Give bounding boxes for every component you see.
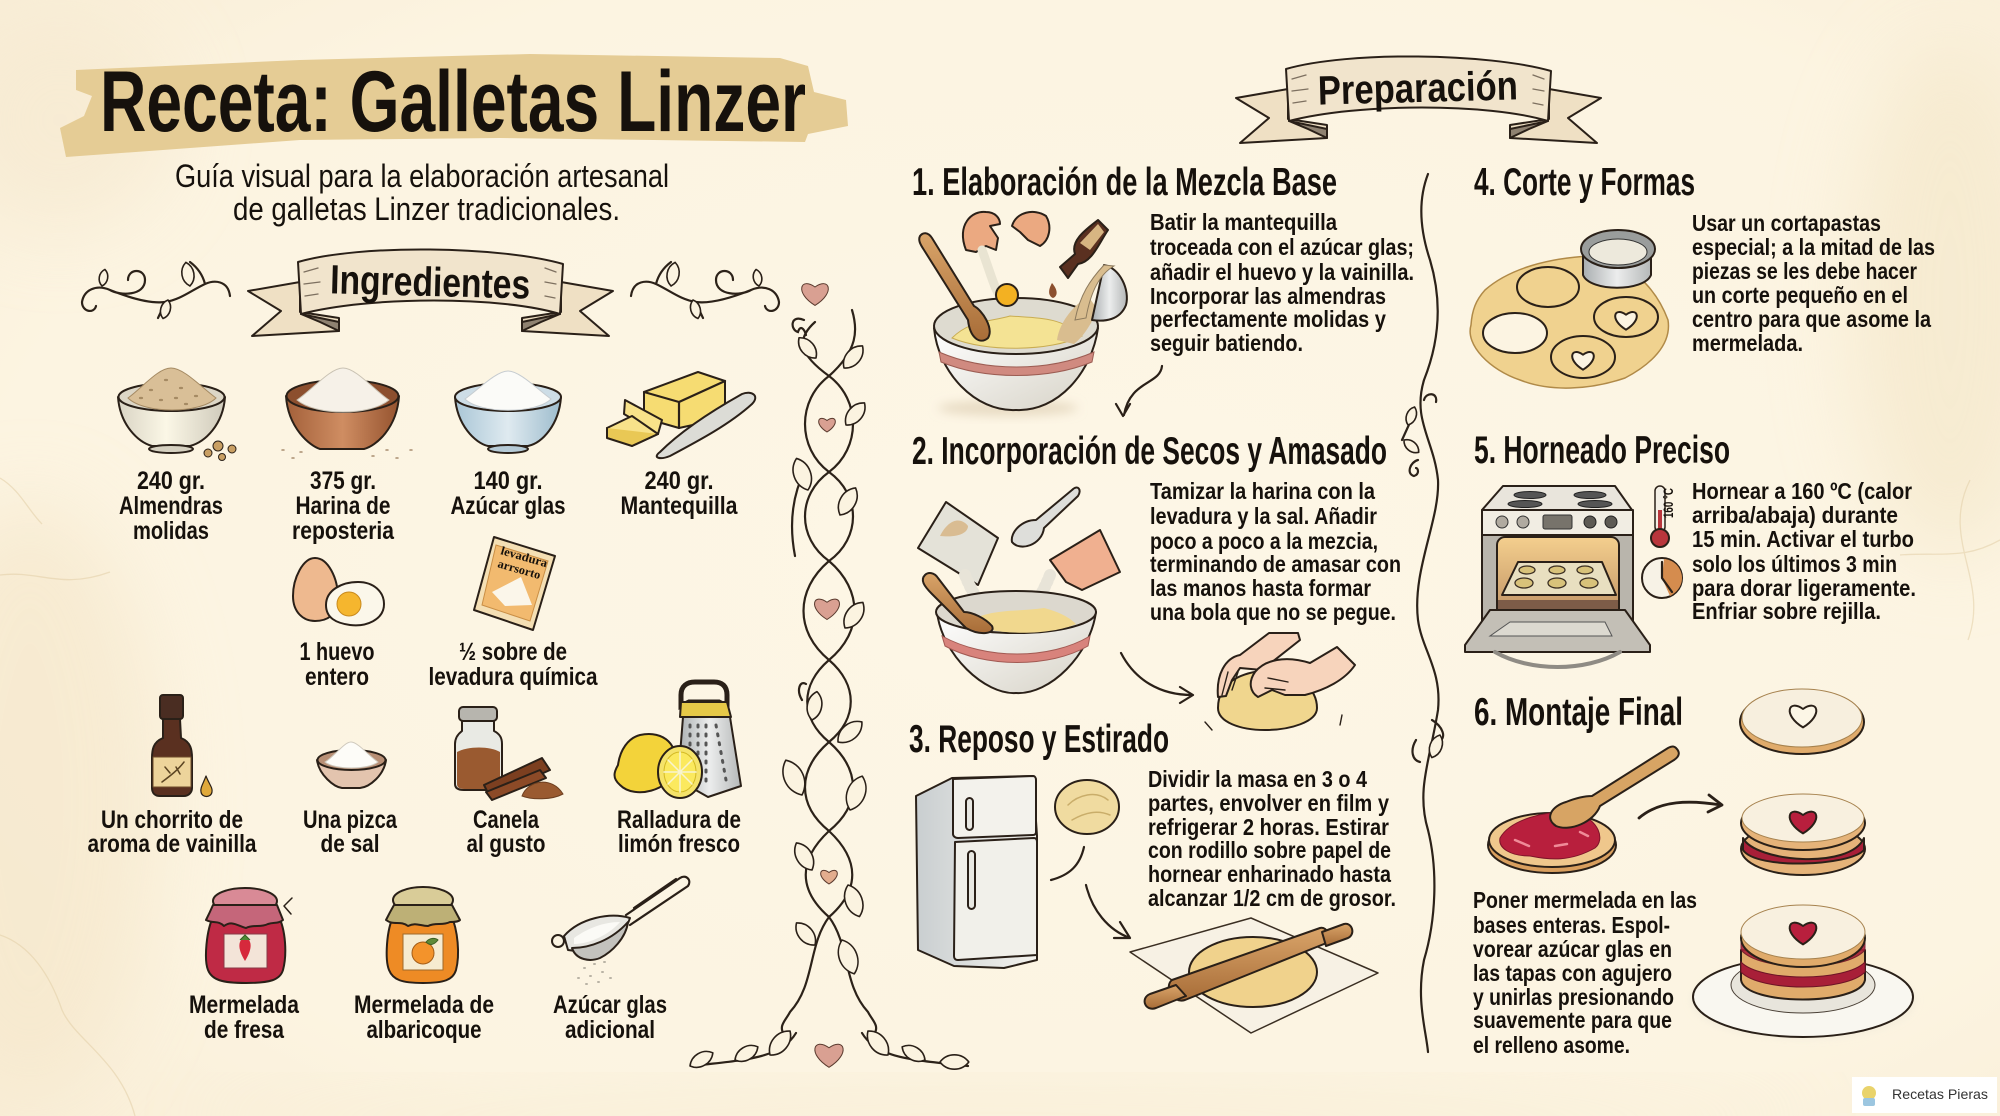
body text: una bola que no se pegue. xyxy=(1150,599,1396,625)
label: levadura química xyxy=(428,663,598,691)
body text: Dividir la masa en 3 o 4 xyxy=(1148,766,1367,792)
arrow xyxy=(1121,653,1193,703)
step 2 xyxy=(912,430,1401,730)
label: al gusto xyxy=(466,830,546,858)
body text: piezas se les debe hacer xyxy=(1692,258,1917,284)
label: limón fresco xyxy=(618,830,740,858)
body text: mermelada. xyxy=(1692,330,1803,356)
step 4 xyxy=(1470,161,1935,388)
banner: Preparación xyxy=(1236,56,1601,143)
body text: partes, envolver en film y xyxy=(1148,790,1389,816)
label xyxy=(354,991,494,1044)
label: Un chorrito de xyxy=(101,806,243,834)
label: Harina de xyxy=(296,492,391,520)
body text: un corte pequeño en el xyxy=(1692,282,1908,308)
heading: 6. Montaje Final xyxy=(1474,691,1683,734)
banner: Preparación: Preparación xyxy=(1317,62,1518,114)
ingredient: huevo xyxy=(293,558,384,691)
label: Azúcar glas xyxy=(450,492,566,520)
heading: 5. Horneado Preciso xyxy=(1474,429,1730,472)
ingredient: vainilla xyxy=(88,695,257,858)
body text: Batir la mantequilla xyxy=(1150,209,1338,235)
ingredient: limon xyxy=(614,682,741,858)
label: de fresa xyxy=(204,1016,285,1044)
label: Mantequilla xyxy=(620,492,738,520)
body text: centro para que asome la xyxy=(1692,306,1932,332)
label: reposteria xyxy=(292,517,395,545)
icon: timer clock xyxy=(1642,558,1682,598)
icon: lemon and grater xyxy=(614,682,741,798)
icon: bowl with sifted flour and hands kneading xyxy=(918,488,1355,730)
body text xyxy=(1473,887,1697,1058)
body text xyxy=(1150,209,1414,356)
body text xyxy=(1692,478,1916,624)
label xyxy=(300,638,374,691)
body text: Usar un cortapastas xyxy=(1692,210,1881,236)
step 1 xyxy=(912,161,1414,416)
label: Mermelada xyxy=(189,991,300,1019)
step 5 xyxy=(1465,429,1916,667)
body text: para dorar ligeramente. xyxy=(1692,575,1916,601)
ingredient: levadura xyxy=(428,537,598,691)
icon: apricot jam jar xyxy=(386,887,460,983)
banner ribbon shape xyxy=(1236,56,1601,143)
heading: 4. Corte y Formas xyxy=(1474,161,1695,204)
icon: mixing bowl with egg, vanilla and almonds xyxy=(919,212,1127,416)
icon: fridge and dough ball xyxy=(916,776,1119,968)
label: Ralladura de xyxy=(617,806,741,834)
label: de sal xyxy=(320,830,380,858)
label: adicional xyxy=(565,1016,655,1044)
icon: yeast sachet xyxy=(474,537,555,630)
arrow xyxy=(1639,795,1722,818)
icon: thermometer xyxy=(1651,486,1676,547)
label: ½ sobre de xyxy=(459,638,567,666)
body text: terminando de amasar con xyxy=(1150,551,1401,577)
body text: hornear enharinado hasta xyxy=(1148,861,1392,887)
icon: egg xyxy=(293,558,384,625)
icon: flour bowl xyxy=(282,368,412,458)
label: Mermelada de xyxy=(354,991,494,1019)
label xyxy=(88,806,257,858)
heading: 2. Incorporación de Secos y Amasado xyxy=(912,430,1387,473)
label: albaricoque xyxy=(366,1016,482,1044)
body text xyxy=(1150,478,1401,625)
icon: cinnamon jar and sticks xyxy=(455,707,563,800)
banner: Ingredientes xyxy=(248,249,613,336)
body text: suavemente para que xyxy=(1473,1007,1672,1033)
label: 240 gr. xyxy=(137,467,205,495)
label xyxy=(466,806,546,858)
body text: Tamizar la harina con la xyxy=(1150,478,1376,504)
label: 240 gr. xyxy=(644,467,714,495)
label xyxy=(428,638,598,691)
body text: bases enteras. Espol- xyxy=(1473,912,1670,938)
label: Canela xyxy=(473,806,540,834)
body text: Poner mermelada en las xyxy=(1473,887,1697,913)
panel: ingredients xyxy=(88,368,755,1044)
body text: con rodillo sobre papel de xyxy=(1148,837,1391,863)
ingredient: mantequilla xyxy=(607,372,755,520)
divider vine between step columns xyxy=(1401,174,1446,1052)
arrow xyxy=(1086,885,1130,938)
icon: yeast sachet: levadura xyxy=(499,543,549,570)
icon: sieve xyxy=(552,877,689,984)
flourish: right of ingredients banner xyxy=(631,261,779,320)
body text: y unirlas presionando xyxy=(1473,984,1674,1010)
ingredient: azucar glas xyxy=(450,371,566,520)
icon: dough with cookie cutter xyxy=(1470,230,1668,388)
heading: 1. Elaboración de la Mezcla Base xyxy=(912,161,1337,204)
body text: poco a poco a la mezcia, xyxy=(1150,528,1378,554)
icon: strawberry jam jar xyxy=(206,888,292,983)
label xyxy=(620,467,738,520)
label xyxy=(119,467,223,545)
body text: el relleno asome. xyxy=(1473,1032,1630,1058)
icon: rolling pin on baking paper xyxy=(1130,918,1378,1033)
banner ribbon shape xyxy=(248,249,613,336)
label: 140 gr. xyxy=(474,467,542,495)
icon: salt bowl xyxy=(317,742,386,788)
body text: las manos hasta formar xyxy=(1150,575,1371,601)
icon: sugar bowl xyxy=(455,371,561,453)
body text: arriba/abaja) durante xyxy=(1692,502,1898,528)
banner: Ingredientes: Ingredientes xyxy=(330,256,531,308)
label: Una pizca xyxy=(303,806,398,834)
body text: levadura y la sal. Añadir xyxy=(1150,503,1377,529)
ingredient: sal xyxy=(303,742,398,858)
icon: butter and knife xyxy=(607,372,755,458)
ingredient: mermelada de albaricoque xyxy=(354,887,494,1044)
body text: refrigerar 2 horas. Estirar xyxy=(1148,814,1389,840)
arrow xyxy=(1116,366,1162,416)
label: 1 huevo xyxy=(300,638,374,666)
icon: jam cookie with spoon xyxy=(1488,746,1679,873)
subtitle xyxy=(175,158,669,227)
body text: Enfriar sobre rejilla. xyxy=(1692,598,1881,624)
vine ornament with hearts xyxy=(687,284,969,1072)
body text xyxy=(1692,210,1935,356)
subtitle: Guía visual para la elaboración artesanal xyxy=(175,158,669,194)
label xyxy=(292,467,395,545)
icon: yeast sachet: arrsorto xyxy=(496,556,542,582)
body text: troceada con el azúcar glas; xyxy=(1150,234,1414,260)
label: 375 gr. xyxy=(310,467,376,495)
icon: stacked cookies on plate xyxy=(1693,905,1913,1037)
body text: especial; a la mitad de las xyxy=(1692,234,1935,260)
step 3 xyxy=(909,718,1396,1033)
flourish: left of ingredients banner xyxy=(82,261,230,320)
label: entero xyxy=(305,663,369,691)
ingredient: azucar glas adicional xyxy=(552,877,689,1044)
icon: thermometer: 160 °C xyxy=(1660,488,1676,518)
icon: vanilla bottle xyxy=(152,695,212,796)
label: Almendras xyxy=(119,492,223,520)
body text: perfectamente molidas y xyxy=(1150,306,1386,332)
ingredient: mermelada de fresa xyxy=(189,888,300,1044)
heading: 3. Reposo y Estirado xyxy=(909,718,1169,761)
body text: Incorporar las almendras xyxy=(1150,283,1386,309)
label: aroma de vainilla xyxy=(88,830,257,858)
label xyxy=(189,991,300,1044)
ingredient: almendras molidas xyxy=(118,368,236,545)
label xyxy=(303,806,398,858)
icon: cookie top with heart xyxy=(1740,689,1864,754)
body text: 15 min. Activar el turbo xyxy=(1692,526,1914,552)
watermark badge: Recetas Pieras xyxy=(1892,1086,1988,1102)
body text: solo los últimos 3 min xyxy=(1692,551,1897,577)
step 6 xyxy=(1473,689,1913,1058)
body text: añadir el huevo y la vainilla. xyxy=(1150,259,1414,285)
label xyxy=(553,991,667,1044)
ingredient: harina de reposteria xyxy=(282,368,412,545)
label: Azúcar glas xyxy=(553,991,667,1019)
watermark badge xyxy=(1852,1077,1997,1113)
body text: las tapas con agujero xyxy=(1473,960,1672,986)
body text: seguir batiendo. xyxy=(1150,330,1303,356)
subtitle: de galletas Linzer tradicionales. xyxy=(233,191,620,227)
ingredient: canela xyxy=(455,707,563,858)
body text xyxy=(1148,766,1396,911)
body text: Hornear a 160 ºC (calor xyxy=(1692,478,1912,504)
icon: almond bowl xyxy=(118,368,236,460)
icon: assembled cookie xyxy=(1741,794,1865,875)
label xyxy=(617,806,741,858)
icon: oven xyxy=(1465,486,1650,667)
body text: vorear azúcar glas en xyxy=(1473,936,1672,962)
title: brush stroke and heading: Receta: Galletas Linzer xyxy=(100,54,806,150)
label: molidas xyxy=(133,517,209,545)
label xyxy=(450,467,566,520)
body text: alcanzar 1/2 cm de grosor. xyxy=(1148,885,1396,911)
